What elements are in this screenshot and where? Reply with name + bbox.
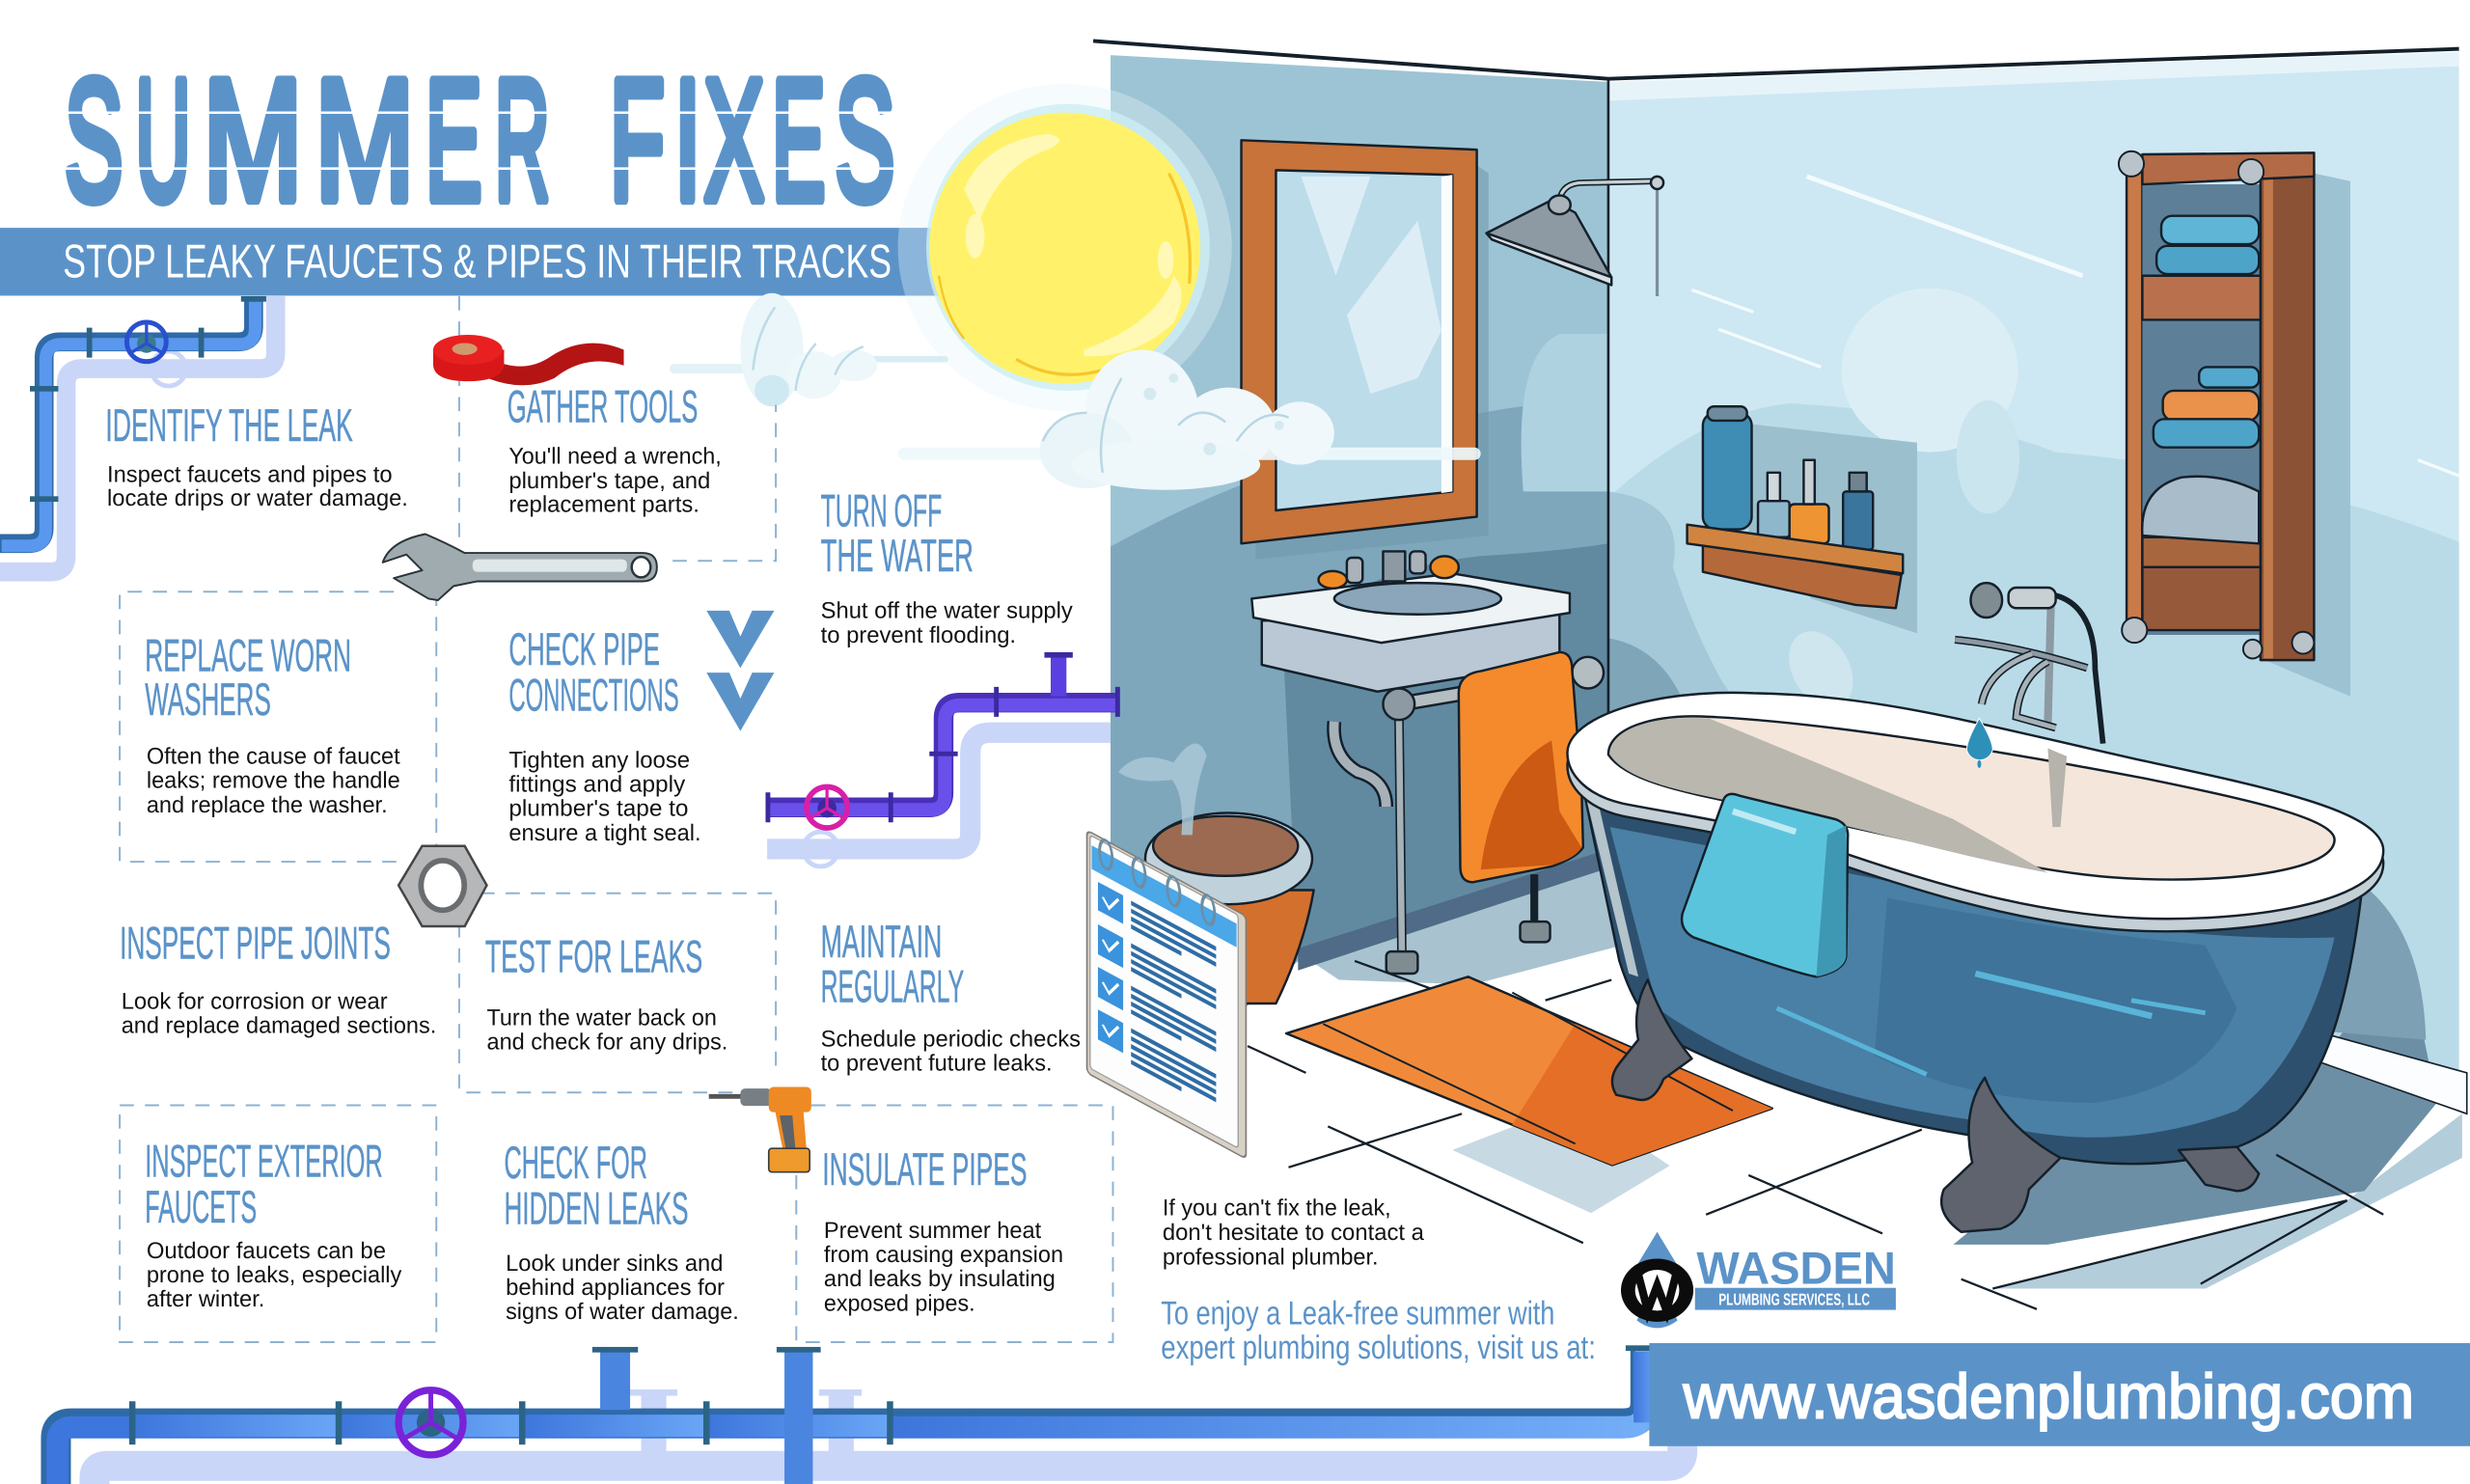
step: test for leaks: TEST FOR LEAKS	[485, 933, 702, 983]
light background pipe: middle	[767, 732, 1111, 866]
checkmarks	[1103, 891, 1118, 1041]
light background pipe: bottom	[95, 1389, 1683, 1484]
step: gather tools: replacement parts.	[508, 493, 700, 518]
clouds	[670, 293, 1481, 490]
step: insulate pipes: from causing expansion	[824, 1243, 1063, 1268]
sun	[898, 84, 1232, 411]
bathtub	[1567, 693, 2383, 1232]
step: check for hidden leaks: HIDDEN LEAKS	[504, 1185, 688, 1235]
step: check pipe connections: ensure a tight seal.	[508, 821, 701, 846]
step: replace worn washers: Often the cause of faucet	[147, 745, 400, 770]
visit us text: expert plumbing solutions, visit us at:	[1161, 1331, 1596, 1366]
down arrows	[706, 611, 774, 731]
title: X	[704, 45, 764, 237]
purple pipe: middle	[765, 652, 1120, 828]
step: check pipe connections: CHECK PIPE	[508, 625, 660, 675]
call to action note: don't hesitate to contact a	[1163, 1221, 1425, 1246]
orange towel	[1459, 652, 1583, 882]
step: inspect exterior faucets: FAUCETS	[145, 1183, 257, 1233]
step: insulate pipes: exposed pipes.	[824, 1292, 975, 1317]
website banner: www.wasdenplumbing.com	[1682, 1362, 2414, 1432]
step: inspect pipe joints: INSPECT PIPE JOINTS	[120, 920, 391, 970]
title	[65, 45, 894, 237]
icon: hex nut	[398, 846, 486, 926]
blue pipe: top left	[0, 296, 266, 546]
icon: red tape roll	[433, 335, 624, 385]
spiral rings	[1100, 837, 1215, 927]
visit us text: To enjoy a Leak-free summer with	[1161, 1296, 1554, 1332]
step: replace worn washers	[120, 591, 436, 862]
step: test for leaks: Turn the water back on	[486, 1006, 717, 1031]
step: check for hidden leaks: signs of water damage.	[506, 1301, 739, 1326]
step: check for hidden leaks: CHECK FOR	[504, 1139, 647, 1190]
step: inspect exterior faucets	[120, 1105, 436, 1342]
mirror	[1242, 140, 1489, 560]
step: maintain regularly: Schedule periodic checks	[821, 1028, 1081, 1053]
step: gather tools: plumber's tape, and	[508, 470, 710, 495]
step: test for leaks	[459, 893, 776, 1092]
step: replace worn washers: WASHERS	[145, 675, 271, 727]
step: inspect pipe joints: Look for corrosion or wear	[122, 990, 388, 1015]
text lines	[1131, 903, 1216, 1108]
step: check pipe connections: Tighten any loose	[508, 749, 690, 774]
icon: wrench	[383, 534, 657, 600]
step: check pipe connections: plumber's tape to	[508, 797, 688, 822]
plant pot	[1118, 743, 1314, 1003]
step: identify the leak: Inspect faucets and pipes to	[107, 463, 393, 488]
step: gather tools: You'll need a wrench,	[508, 445, 722, 470]
step: insulate pipes	[796, 1105, 1112, 1342]
step: insulate pipes: Prevent summer heat	[824, 1219, 1041, 1244]
wall shelf with bottles	[1688, 406, 1917, 633]
valve: magenta	[807, 787, 847, 828]
tub body	[1583, 787, 2363, 1164]
step: check pipe connections: CONNECTIONS	[508, 672, 679, 722]
tub feet	[1612, 980, 2259, 1232]
shower	[1487, 177, 1663, 296]
pipe flanges	[129, 1401, 893, 1444]
logo emblem	[1621, 1232, 1693, 1326]
bathroom illustration	[1093, 41, 2467, 1309]
title: U	[135, 45, 191, 237]
checkboxes	[1098, 882, 1123, 1053]
call to action note	[1163, 1196, 1425, 1271]
title: E	[425, 45, 482, 237]
pipe branches	[592, 1345, 1666, 1484]
step: maintain regularly: to prevent future leaks.	[821, 1052, 1053, 1077]
cloud: upper	[670, 293, 948, 406]
logo: Wasden Plumbing Services: PLUMBING SERVICES, LLC	[1718, 1291, 1870, 1310]
step: inspect pipe joints	[120, 920, 436, 1039]
title: E	[772, 45, 826, 237]
checklist calendar icon	[1087, 830, 1246, 1159]
step: check pipe connections: fittings and apply	[508, 773, 686, 798]
step: gather tools	[459, 296, 776, 561]
step: test for leaks: and check for any drips.	[486, 1031, 727, 1056]
logo: Wasden Plumbing Services: WASDEN	[1696, 1245, 1896, 1295]
valve: blue	[126, 322, 166, 362]
step: inspect exterior faucets: INSPECT EXTERIOR	[145, 1138, 383, 1188]
step: maintain regularly: REGULARLY	[821, 963, 964, 1013]
step: check for hidden leaks: behind appliances for	[506, 1276, 725, 1302]
title: M	[316, 45, 414, 237]
blue pipe: bottom	[56, 1345, 1666, 1484]
step: insulate pipes: INSULATE PIPES	[822, 1145, 1027, 1195]
step: identify the leak: IDENTIFY THE LEAK	[105, 401, 353, 453]
wall edge lines	[1093, 41, 2459, 859]
tub rim	[1567, 693, 2383, 931]
title: M	[204, 45, 302, 237]
step: inspect pipe joints: and replace damaged sections.	[122, 1014, 436, 1039]
step: turn off the water: to prevent flooding.	[821, 623, 1016, 648]
step: inspect exterior faucets: Outdoor faucets can be	[147, 1239, 386, 1264]
icon: drill	[709, 1087, 811, 1172]
step: check for hidden leaks	[504, 1139, 739, 1326]
step: gather tools: GATHER TOOLS	[508, 383, 698, 433]
step: replace worn washers: REPLACE WORN	[145, 632, 351, 682]
step: replace worn washers: and replace the washer.	[147, 794, 388, 819]
step: check for hidden leaks: Look under sinks and	[506, 1251, 723, 1278]
blue towel on tub	[1682, 794, 1848, 976]
step: turn off the water: THE WATER	[821, 532, 974, 582]
sink pipes and legs	[1334, 704, 1551, 974]
subtitle banner background	[0, 228, 946, 295]
bath faucet and water drop	[1955, 583, 2103, 768]
step: inspect exterior faucets: prone to leaks, especially	[147, 1263, 402, 1289]
title: S	[835, 45, 894, 237]
step: turn off the water: Shut off the water supply	[821, 599, 1074, 624]
step: inspect exterior faucets: after winter.	[147, 1288, 264, 1313]
floor shadows and tiles	[1248, 851, 2467, 1309]
step: identify the leak: locate drips or water damage.	[107, 487, 408, 512]
website banner	[1649, 1343, 2470, 1446]
left wall	[1111, 55, 1676, 1008]
step: turn off the water: TURN OFF	[821, 487, 942, 537]
step: turn off the water	[821, 487, 1074, 648]
title: R	[495, 45, 550, 237]
light background pipe: top left	[0, 296, 276, 572]
step: maintain regularly: MAINTAIN	[821, 918, 942, 968]
pipe flanges	[765, 687, 1120, 822]
pipe flanges	[30, 296, 266, 502]
step: check pipe connections	[508, 625, 701, 846]
title: S	[65, 45, 123, 237]
call to action note: professional plumber.	[1163, 1246, 1379, 1271]
valve: purple	[398, 1390, 463, 1455]
visit us text	[1161, 1296, 1596, 1366]
step: insulate pipes: and leaks by insulating	[824, 1268, 1056, 1293]
title: I	[674, 45, 701, 237]
right wall	[1608, 52, 2459, 1103]
mat	[1286, 976, 1772, 1166]
logo: Wasden Plumbing Services	[1621, 1232, 1896, 1326]
tall shelf unit	[2119, 151, 2350, 697]
step: maintain regularly	[821, 918, 1081, 1077]
faucet	[1319, 551, 1459, 589]
cloud: lower	[898, 349, 1481, 490]
call to action note: If you can't fix the leak,	[1163, 1196, 1391, 1222]
subtitle: STOP LEAKY FAUCETS & PIPES IN THEIR TRACKS	[63, 236, 892, 289]
step: identify the leak	[105, 401, 408, 512]
title: F	[610, 45, 665, 237]
step: replace worn washers: leaks; remove the handle	[147, 769, 400, 794]
towel bar	[1383, 657, 1604, 720]
sink	[1251, 551, 1604, 974]
